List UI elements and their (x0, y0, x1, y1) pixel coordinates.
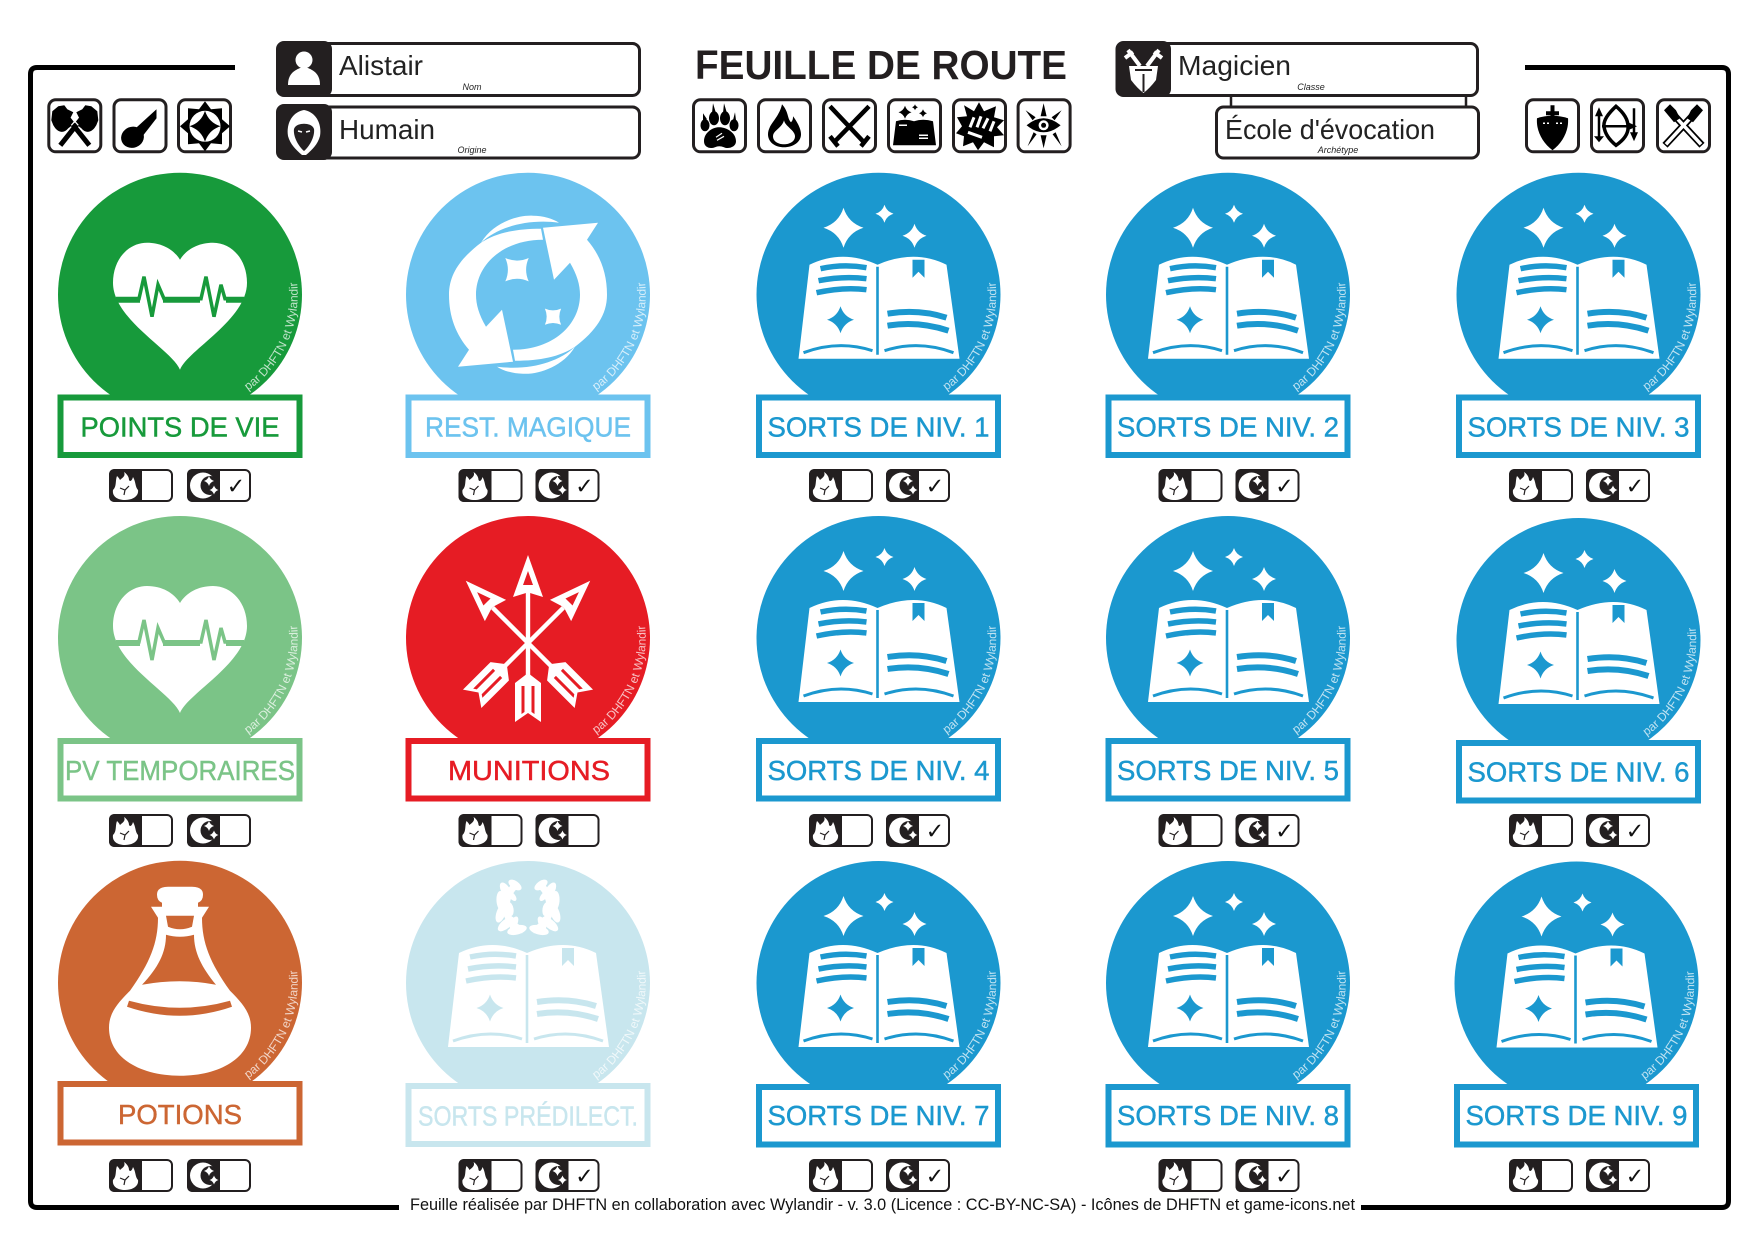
icon: bow and arrows (1592, 100, 1644, 152)
icon: spellbook (888, 100, 940, 152)
badge disc (1106, 173, 1350, 417)
credit: par DHFTN et Wylandir (943, 626, 997, 736)
panel: munitions (406, 516, 650, 847)
check mark: ✓ (575, 1165, 594, 1190)
badge disc (756, 173, 1000, 417)
label: sorts de niv. 1: SORTS DE NIV. 1 (768, 412, 990, 443)
toggle: short rest (109, 469, 172, 502)
label: sorts de niv. 9 (1457, 1087, 1696, 1144)
icon: radiant eye (1018, 100, 1070, 152)
toggle: short rest (1509, 814, 1572, 847)
credit: par DHFTN et Wylandir (1641, 972, 1695, 1082)
icon: spellbook (798, 205, 960, 359)
field: origin (276, 104, 640, 160)
field: archetype (1216, 107, 1478, 158)
panel: sorts de niveau 1 (756, 172, 1001, 502)
icon: laurel wreath and book (448, 877, 609, 1047)
label: sorts de niv. 6 (1459, 743, 1698, 800)
label: munitions (408, 741, 648, 798)
label: rest. magique: REST. MAGIQUE (425, 412, 631, 443)
icon: heart (113, 243, 247, 370)
icon: shield and swords (1116, 41, 1171, 97)
icon: paw (694, 100, 746, 152)
field: origin: Origine (457, 145, 487, 155)
panel: sorts de niveau 8 (1106, 861, 1350, 1192)
badge disc (756, 516, 1000, 760)
toggle: long rest (1236, 1159, 1298, 1192)
toggle: long rest (1236, 814, 1298, 847)
label: sorts de niv. 7 (759, 1087, 998, 1144)
check mark: ✓ (1626, 1165, 1644, 1190)
icon: potion flask (109, 887, 251, 1076)
icon: hooded face (276, 104, 332, 160)
field: name (276, 41, 640, 97)
field: class: Classe (1297, 82, 1325, 92)
field: name: Alistair (339, 50, 423, 81)
toggle: long rest (1236, 469, 1298, 502)
icon: spellbook (798, 893, 960, 1047)
panel: sorts de niveau 2 (1106, 172, 1350, 502)
check mark: ✓ (1626, 475, 1644, 500)
toggle: long rest (1586, 1159, 1649, 1192)
field: origin: Humain (339, 114, 435, 145)
icon: spellbook (1496, 894, 1658, 1048)
toggle: long rest (886, 1159, 949, 1192)
check mark: ✓ (1275, 820, 1294, 845)
check mark: ✓ (926, 475, 944, 500)
field: class (1116, 41, 1478, 107)
icon: flame (758, 100, 810, 152)
toggle: short rest (458, 469, 522, 502)
badge disc (1106, 516, 1350, 760)
label: points de vie: POINTS DE VIE (80, 412, 280, 443)
toggle: short rest (458, 814, 522, 847)
panel: sorts de niveau 9 (1454, 862, 1699, 1192)
credit: par DHFTN et Wylandir (244, 970, 298, 1080)
panel: sorts de niveau 5 (1106, 516, 1350, 847)
title: FEUILLE DE ROUTE (695, 42, 1067, 88)
label: sorts de niv. 3: SORTS DE NIV. 3 (1468, 412, 1690, 443)
toggle: long rest (1586, 814, 1649, 847)
credit: par DHFTN et Wylandir (1292, 282, 1346, 392)
icon: shield with sword (1526, 100, 1578, 152)
badge disc (406, 173, 650, 417)
icon: outlined crossed swords (1658, 100, 1710, 152)
field: name: Nom (462, 82, 482, 92)
toggle: short rest (1509, 1159, 1572, 1192)
icon: lute (114, 100, 166, 152)
toggle: short rest (1158, 469, 1222, 502)
toggle: long rest (536, 1159, 598, 1192)
toggle: long rest (536, 469, 598, 502)
credit: par DHFTN et Wylandir (244, 626, 298, 736)
icon: spellbook (798, 548, 960, 702)
badge disc (58, 516, 302, 760)
icon: restoration cycle (449, 216, 607, 374)
credit: par DHFTN et Wylandir (943, 282, 997, 392)
icon: heart (113, 586, 247, 713)
badge disc (756, 861, 1000, 1105)
check mark: ✓ (926, 820, 944, 845)
toggle: short rest (109, 1159, 172, 1192)
credit: par DHFTN et Wylandir (1643, 628, 1697, 738)
icon: crossed axes (49, 100, 101, 152)
toggle: short rest (809, 469, 872, 502)
check mark: ✓ (575, 475, 594, 500)
label: pv temporaires (60, 741, 300, 798)
toggle: short rest (809, 1159, 872, 1192)
panel: sorts de niveau 7 (756, 861, 1001, 1192)
credit: par DHFTN et Wylandir (592, 626, 646, 736)
badge disc (1454, 862, 1698, 1106)
label: points de vie (60, 398, 300, 455)
check mark: ✓ (1626, 820, 1644, 845)
toggle: short rest (458, 1159, 522, 1192)
badge disc (58, 173, 302, 417)
label: sorts prédilect. (408, 1086, 648, 1144)
credit: par DHFTN et Wylandir (593, 971, 646, 1080)
field: archetype: École d'évocation (1225, 114, 1435, 145)
panel: sorts de niveau 3 (1456, 172, 1701, 502)
icon: spellbook (1498, 205, 1660, 359)
toggle: short rest (1158, 1159, 1222, 1192)
panel: restauration magique (406, 172, 650, 502)
toggle: long rest (886, 469, 949, 502)
label: potions (60, 1084, 300, 1142)
icon: burst fist (954, 100, 1006, 152)
footer credits: Feuille réalisée par DHFTN en collaboration avec Wylandir - v. 3.0 (Licence : CC-BY-NC-SA) - Icônes de DHFTN et game-icons.net (410, 1195, 1355, 1214)
label: sorts de niv. 8 (1108, 1087, 1348, 1144)
panel: points de vie (58, 172, 302, 502)
field: archetype: Archétype (1317, 145, 1358, 155)
credit: par DHFTN et Wylandir (244, 282, 298, 392)
toggle: long rest (187, 469, 250, 502)
field: class: Magicien (1178, 50, 1291, 81)
icon: spellbook (1148, 548, 1309, 702)
icon: spellbook (1498, 550, 1660, 704)
label: sorts de niv. 6: SORTS DE NIV. 6 (1468, 756, 1690, 788)
label: rest. magique (408, 398, 648, 455)
panel: pv temporaires (58, 516, 302, 847)
toggle: long rest (536, 814, 598, 847)
label: sorts de niv. 4: SORTS DE NIV. 4 (768, 755, 990, 786)
badge disc (1456, 518, 1700, 762)
icon: spellbook (1148, 205, 1309, 359)
label: sorts de niv. 3 (1459, 398, 1698, 455)
panel: sorts de niveau 6 (1456, 518, 1701, 847)
label: sorts de niv. 5: SORTS DE NIV. 5 (1117, 755, 1339, 786)
badge disc (1456, 173, 1700, 417)
label: sorts de niv. 8: SORTS DE NIV. 8 (1117, 1100, 1339, 1131)
label: sorts de niv. 7: SORTS DE NIV. 7 (768, 1100, 990, 1131)
label: sorts de niv. 2: SORTS DE NIV. 2 (1117, 412, 1339, 443)
toggle: long rest (886, 814, 949, 847)
toggle: short rest (1158, 814, 1222, 847)
badge disc (58, 861, 302, 1105)
panel: potions (58, 860, 302, 1192)
label: munitions: MUNITIONS (448, 755, 610, 786)
toggle: short rest (1509, 469, 1572, 502)
panel: sorts de niveau 4 (756, 516, 1001, 847)
check mark: ✓ (1275, 475, 1294, 500)
label: sorts de niv. 2 (1108, 398, 1348, 455)
credit: par DHFTN et Wylandir (1292, 971, 1346, 1081)
toggle: long rest (187, 1159, 250, 1192)
panel: sorts de prédilection (406, 861, 650, 1192)
badge disc (406, 861, 650, 1105)
check mark: ✓ (227, 475, 245, 500)
label: pv temporaires: PV TEMPORAIRES (65, 755, 295, 786)
badge disc (406, 516, 650, 760)
label: sorts de niv. 9: SORTS DE NIV. 9 (1466, 1100, 1688, 1131)
label: sorts prédilect.: SORTS PRÉDILECT. (418, 1100, 638, 1132)
toggle: short rest (809, 814, 872, 847)
label: sorts de niv. 4 (759, 741, 998, 798)
icon: radiant star (178, 100, 230, 152)
label: potions: POTIONS (118, 1099, 242, 1130)
credit: par DHFTN et Wylandir (592, 282, 646, 392)
credit: par DHFTN et Wylandir (943, 971, 997, 1081)
toggle: long rest (187, 814, 250, 847)
icon: person (276, 41, 332, 97)
credit: par DHFTN et Wylandir (1643, 282, 1697, 392)
icon: spellbook (1148, 893, 1309, 1047)
check mark: ✓ (1275, 1165, 1294, 1190)
toggle: long rest (1586, 469, 1649, 502)
toggle: short rest (109, 814, 172, 847)
icon: crossed swords (824, 100, 876, 152)
label: sorts de niv. 5 (1108, 741, 1348, 798)
icon: three arrows (455, 555, 601, 722)
credit: par DHFTN et Wylandir (1292, 626, 1346, 736)
badge disc (1106, 861, 1350, 1105)
label: sorts de niv. 1 (759, 398, 998, 455)
check mark: ✓ (926, 1165, 944, 1190)
